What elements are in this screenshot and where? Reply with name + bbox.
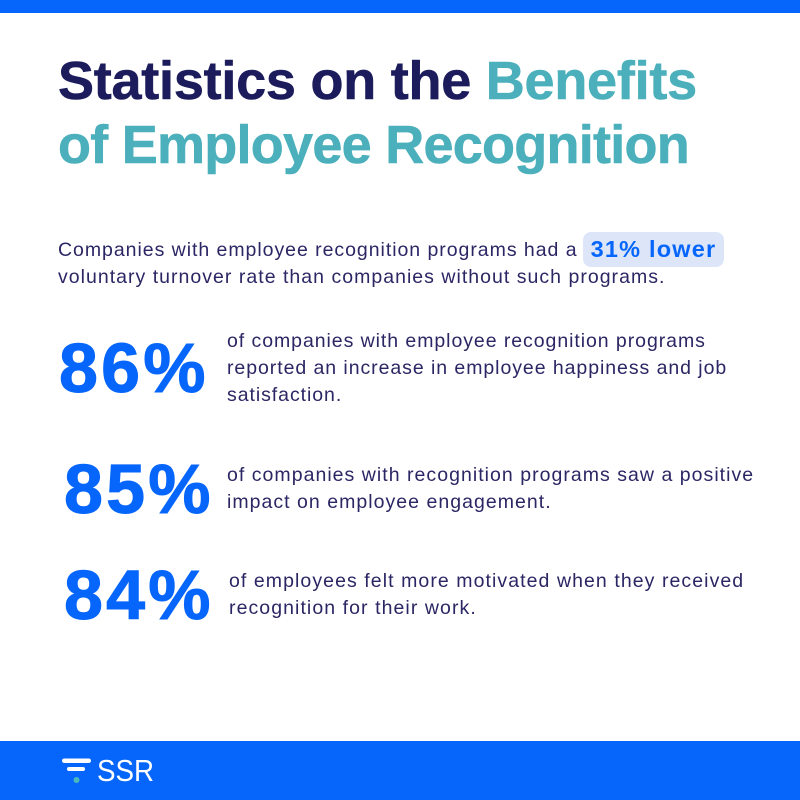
stat text: 86%: reported an increase in employee happiness and job (227, 357, 727, 379)
stat text: 85% (227, 464, 754, 513)
intro text: voluntary turnover rate than companies without such programs. (58, 266, 665, 288)
title: Statistics on the Benefits (58, 51, 697, 111)
stat text: 86%: satisfaction. (227, 384, 342, 406)
stat text: 86%: of companies with employee recognition programs (227, 330, 706, 352)
logo wordmark: SSR (97, 753, 154, 788)
stat number: 85%: 85% (64, 450, 214, 528)
stat number: 84%: 84% (64, 556, 214, 634)
top bar (0, 0, 800, 13)
title (58, 51, 697, 175)
stat text: 84%: recognition for their work. (229, 597, 477, 619)
stat text: 84% (229, 570, 744, 619)
footer bar (0, 741, 800, 800)
intro text: Companies with employee recognition programs had a (58, 239, 578, 261)
stat number: 86%: 86% (59, 329, 209, 407)
highlight: 31% lower (583, 232, 724, 267)
stat text: 86% (227, 330, 727, 406)
highlight: 31% lower: 31% lower (591, 236, 716, 262)
stat text: 85%: impact on employee engagement. (227, 491, 552, 513)
stat text: 85%: of companies with recognition programs saw a positive (227, 464, 754, 486)
icon: SSR logo (62, 758, 91, 783)
stat text: 84%: of employees felt more motivated when they received (229, 570, 744, 592)
title: of Employee Recognition (58, 115, 689, 175)
intro text (58, 239, 665, 288)
